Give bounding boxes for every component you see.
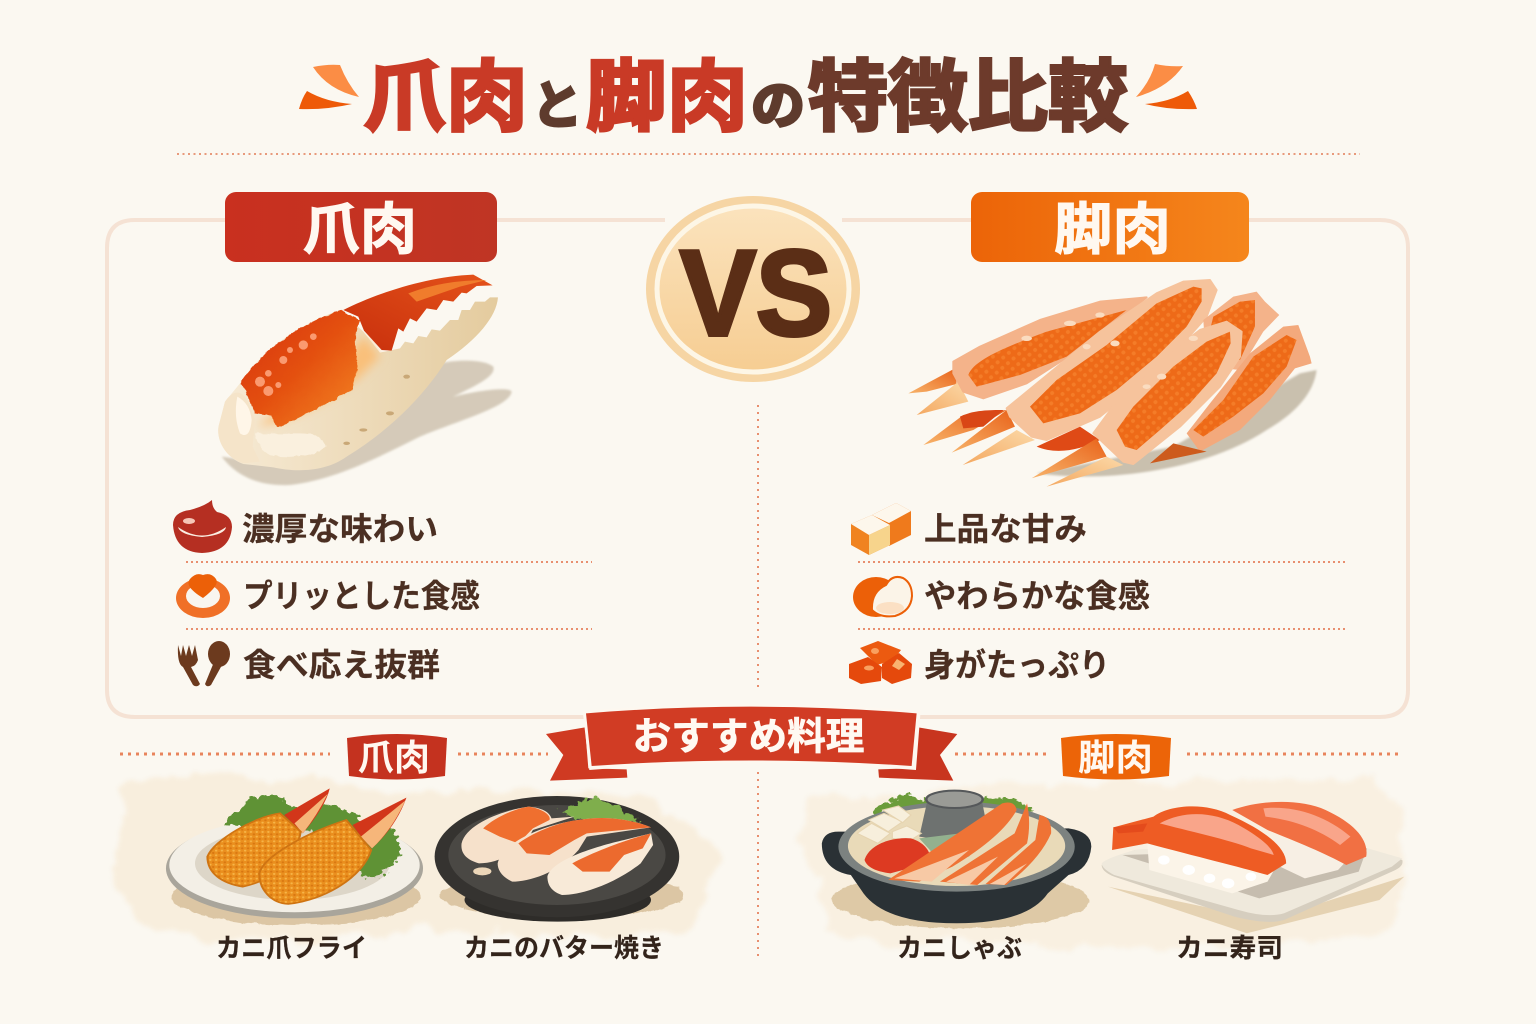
text: soft texture: やわらかな食感 [924, 578, 1150, 614]
icon: sauce bowl [173, 500, 232, 553]
title text [364, 53, 1128, 141]
title decoration right [1136, 64, 1197, 109]
icon: soft texture [853, 577, 912, 617]
VS emblem [646, 196, 860, 382]
illustration: crab claw [218, 275, 512, 485]
title text: と [532, 78, 582, 136]
VS emblem: VS [680, 225, 832, 361]
icon: bouncy texture [176, 574, 230, 618]
badge: claw meat [225, 192, 497, 262]
dish labels [216, 933, 1283, 963]
feature list: claw meat [173, 500, 480, 686]
label: crab shabu: カニしゃぶ [897, 933, 1022, 963]
title decoration left [299, 65, 359, 109]
title text: 脚肉 [586, 53, 748, 141]
leg A [908, 368, 957, 393]
icon: fork and spoon [178, 641, 230, 686]
tag: leg meat dishes: 脚肉 [1078, 737, 1153, 778]
watercolor backdrop: leg dishes [798, 778, 1404, 952]
label: fried crab claw: カニ爪フライ [216, 933, 367, 963]
text: plenty of meat: 身がたっぷり [924, 647, 1110, 683]
icon: chunks of meat [849, 641, 912, 684]
leg E [1203, 292, 1279, 370]
title text: 特徴比較 [808, 53, 1128, 141]
banner text: おすすめ料理 [633, 716, 864, 758]
text: springy texture: プリッとした食感 [243, 578, 480, 614]
illustration: crab legs [908, 280, 1317, 487]
leg D [1187, 325, 1312, 452]
section dotted lines [120, 752, 1402, 756]
label: crab sushi: カニ寿司 [1176, 933, 1283, 963]
badge: leg meat [971, 192, 1249, 262]
text: refined sweetness: 上品な甘み [924, 511, 1087, 547]
dish: crab sushi [1102, 802, 1404, 933]
badge: leg meat: 脚肉 [1054, 198, 1171, 261]
label: butter grilled crab: カニのバター焼き [464, 933, 664, 963]
title [299, 53, 1197, 141]
tag: claw meat dishes: 爪肉 [358, 737, 430, 778]
banner: recommended dishes [546, 704, 957, 781]
dish: crab shabu [822, 791, 1091, 928]
panel: comparison frame [107, 220, 1408, 717]
watercolor backdrop: claw dishes [116, 776, 718, 942]
dish: fried claw [166, 788, 423, 925]
dish: butter-grilled crab [435, 796, 684, 922]
center divider [757, 405, 759, 960]
tag: leg meat dishes [1061, 734, 1171, 780]
icon: sugar cubes [851, 503, 911, 555]
lower small leg [923, 410, 1007, 445]
text: filling: 食べ応え抜群 [243, 647, 440, 683]
tag: claw meat dishes [347, 734, 447, 780]
title text: の [751, 78, 805, 136]
badge: claw meat: 爪肉 [303, 198, 417, 261]
leg C [1032, 438, 1107, 478]
feature list: leg meat [849, 503, 1150, 684]
text: rich flavor: 濃厚な味わい [242, 511, 438, 547]
leg B [952, 410, 1015, 453]
title text: 爪肉 [364, 53, 528, 141]
